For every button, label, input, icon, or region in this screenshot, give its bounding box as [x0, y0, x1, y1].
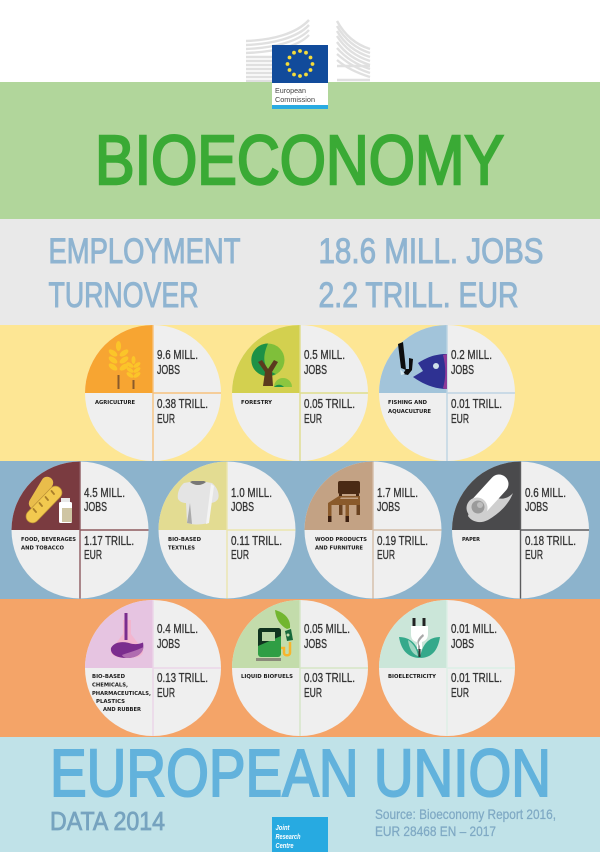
turnover unit: EUR [231, 548, 249, 562]
sector: bioelectricity [379, 600, 515, 736]
turnover unit: EUR [157, 686, 175, 700]
jobs value: 1.7 MILL. [377, 486, 418, 500]
sector name: FORESTRY [241, 400, 272, 406]
sector: food, beverages and tobacco [12, 462, 148, 598]
sector: wood products and furniture [304, 462, 442, 598]
jobs value: 0.5 MILL. [304, 348, 345, 362]
turnover unit: EUR [525, 548, 543, 562]
sector: bio-based textiles [158, 462, 296, 598]
jobs value: 0.4 MILL. [157, 622, 198, 636]
band: orange row [0, 599, 600, 737]
icon: paper roll [466, 484, 513, 522]
jobs unit: JOBS [304, 363, 327, 377]
turnover value: 0.18 TRILL. [525, 534, 576, 548]
logo: Joint Research Centre [272, 817, 328, 852]
logo: European Commission [272, 45, 328, 109]
sector name: LIQUID BIOFUELS [241, 674, 293, 680]
turnover unit: EUR [84, 548, 102, 562]
turnover value: 1.17 TRILL. [84, 534, 134, 548]
source line 2: EUR 28468 EN – 2017 [375, 823, 496, 839]
sector: bio-based chemicals [85, 600, 221, 736]
sector name: FOOD, BEVERAGES [21, 537, 76, 543]
sector name: AGRICULTURE [95, 400, 135, 406]
jobs unit: JOBS [451, 363, 474, 377]
turnover value: 0.03 TRILL. [304, 671, 355, 685]
turnover unit: EUR [157, 412, 175, 426]
band: blue row [0, 461, 600, 599]
icon: fuel pump with leaf [256, 610, 293, 661]
sector name: BIO-BASED [92, 674, 126, 680]
sector name line 2: CHEMICALS, [92, 682, 128, 688]
panel: headline figures [0, 219, 600, 325]
jobs unit: JOBS [84, 500, 107, 514]
data year: DATA 2014 [50, 806, 165, 836]
icon: bread and milk [23, 474, 72, 526]
sector name line 5: AND RUBBER [103, 707, 142, 713]
sector name: BIO-BASED [168, 537, 202, 543]
turnover value: 2.2 TRILL. EUR [318, 276, 518, 315]
jobs value: 4.5 MILL. [84, 486, 125, 500]
logo: Joint Research Centre: Joint [276, 825, 290, 832]
logo: Joint Research Centre: Research [276, 834, 300, 841]
sector: forestry [232, 325, 368, 461]
band: yellow row [0, 325, 600, 461]
sector name line 2: AND FURNITURE [315, 546, 363, 552]
jobs value: 0.01 MILL. [451, 622, 497, 636]
icon: tree [251, 343, 292, 387]
sector name line 2: AQUACULTURE [388, 409, 431, 415]
icon: Berlaymont building [246, 20, 370, 81]
sector name: WOOD PRODUCTS [315, 537, 367, 543]
jobs value: 9.6 MILL. [157, 348, 198, 362]
logo: Joint Research Centre: Centre [276, 843, 294, 850]
sector: paper [452, 462, 589, 598]
logo: European Commission: Commission [275, 95, 315, 104]
sector: fishing and aquaculture [379, 325, 515, 461]
turnover value: 0.13 TRILL. [157, 671, 208, 685]
jobs value: 0.2 MILL. [451, 348, 492, 362]
turnover label: TURNOVER [48, 276, 198, 315]
panel: footer [0, 736, 600, 852]
jobs unit: JOBS [377, 500, 400, 514]
turnover value: 0.38 TRILL. [157, 397, 208, 411]
jobs unit: JOBS [451, 637, 474, 651]
turnover value: 0.01 TRILL. [451, 397, 502, 411]
turnover value: 0.11 TRILL. [231, 534, 282, 548]
sector name line 2: TEXTILES [168, 546, 195, 552]
turnover unit: EUR [451, 686, 469, 700]
source line 1: Source: Bioeconomy Report 2016, [375, 806, 556, 822]
sector name: PAPER [462, 537, 481, 543]
title band [0, 82, 600, 219]
icon: t-shirt [178, 481, 219, 524]
icon: fish and hook [398, 342, 447, 389]
title: BIOECONOMY [95, 121, 504, 199]
sector: liquid biofuels [232, 600, 368, 736]
sector name line 2: AND TOBACCO [21, 546, 64, 552]
sector: agriculture [85, 325, 221, 461]
sector name line 3: PHARMACEUTICALS, [92, 691, 151, 697]
jobs unit: JOBS [157, 363, 180, 377]
icon: chair [328, 481, 360, 522]
employment value: 18.6 MILL. JOBS [318, 232, 544, 271]
sector name line 4: PLASTICS [96, 699, 125, 705]
turnover unit: EUR [304, 686, 322, 700]
jobs unit: JOBS [231, 500, 254, 514]
sector name: BIOELECTRICITY [388, 674, 436, 680]
icon: flask [111, 613, 144, 658]
turnover unit: EUR [304, 412, 322, 426]
jobs value: 0.6 MILL. [525, 486, 566, 500]
icon: wheat [107, 341, 141, 389]
jobs unit: JOBS [525, 500, 548, 514]
background band: logo area [0, 0, 600, 82]
jobs value: 0.05 MILL. [304, 622, 350, 636]
turnover unit: EUR [377, 548, 395, 562]
turnover value: 0.19 TRILL. [377, 534, 428, 548]
turnover unit: EUR [451, 412, 469, 426]
logo: European Commission: European [275, 86, 306, 95]
icon: plug and leaves [399, 618, 440, 658]
turnover value: 0.01 TRILL. [451, 671, 502, 685]
employment label: EMPLOYMENT [48, 232, 240, 271]
turnover value: 0.05 TRILL. [304, 397, 355, 411]
jobs unit: JOBS [157, 637, 180, 651]
jobs unit: JOBS [304, 637, 327, 651]
sector name: FISHING AND [388, 400, 428, 406]
jobs value: 1.0 MILL. [231, 486, 272, 500]
